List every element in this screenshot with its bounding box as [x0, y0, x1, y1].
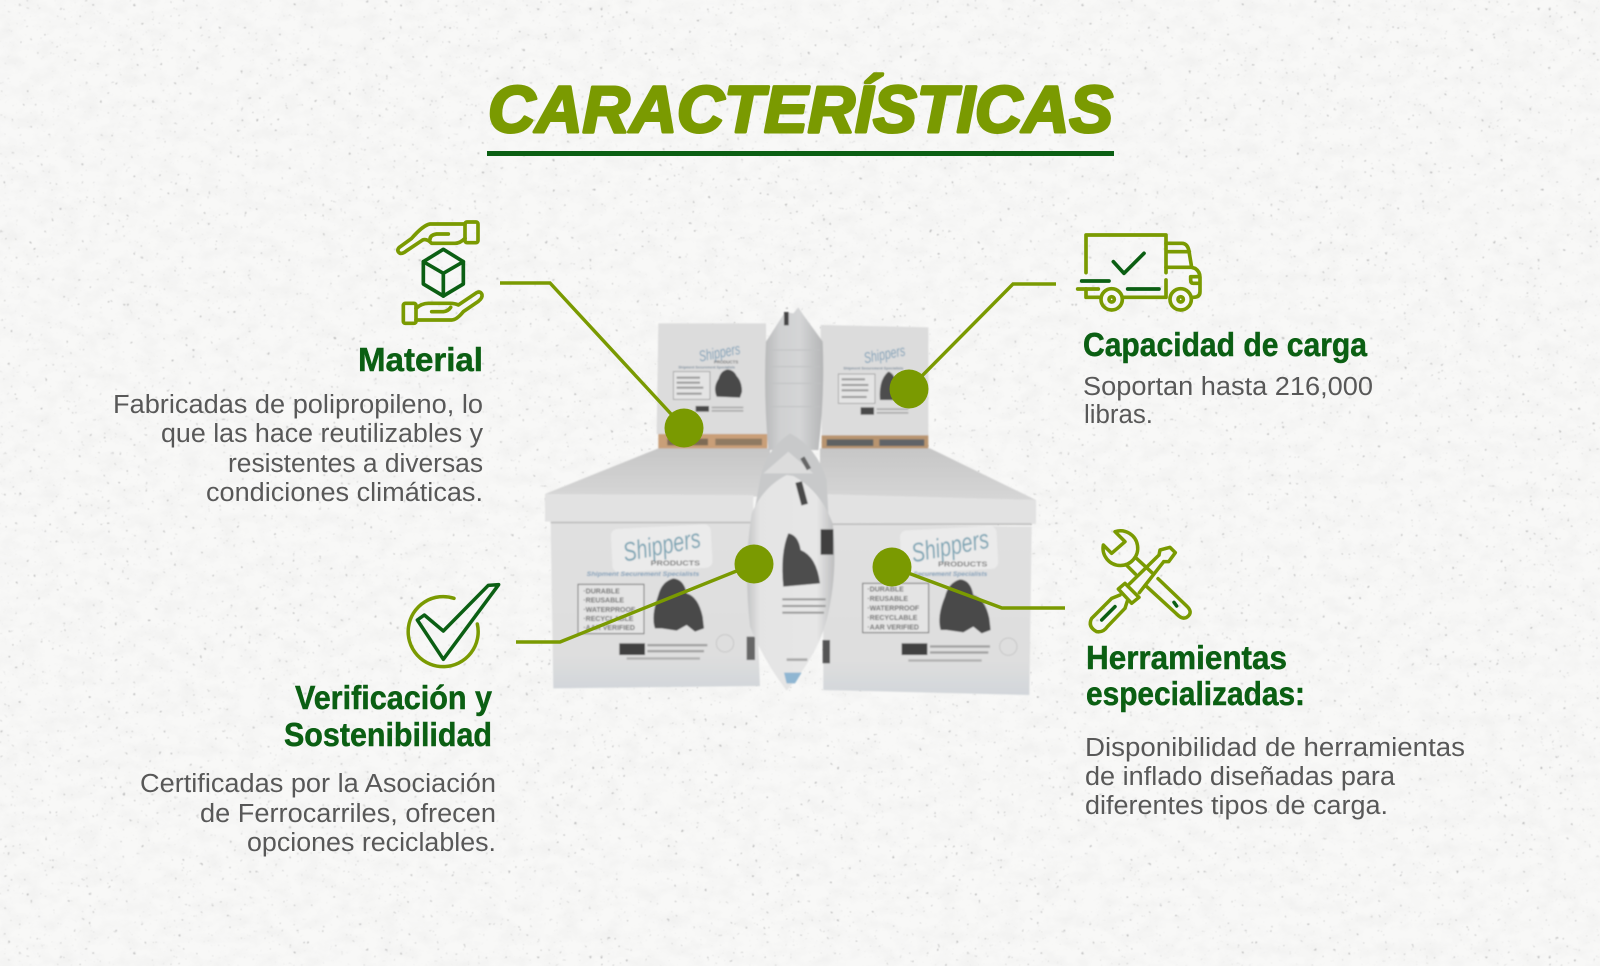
back right box: Shippers	[863, 343, 907, 367]
heading and text: Verificación y Sostenibilidad: opciones reciclables.	[247, 829, 496, 857]
icon: hands holding box	[398, 222, 482, 323]
heading and text: Herramientas especializadas: especializadas:	[1086, 675, 1305, 712]
callout line and dot: Material	[500, 283, 704, 448]
heading and text: Herramientas especializadas: Disponibilidad de herramientas	[1085, 734, 1465, 762]
upper dunnage bag	[765, 307, 823, 450]
back left box: Shippers	[698, 341, 742, 366]
lower dunnage bag	[747, 433, 835, 691]
callout line and dot: Capacidad de carga	[890, 284, 1056, 408]
back left box: Shipment Securement Specialists	[678, 364, 736, 369]
back right box: Shipment Securement Specialists	[843, 365, 904, 370]
product photo: boxes and dunnage bags	[545, 307, 1036, 695]
heading and text: Verificación y Sostenibilidad: Certificadas por la Asociación	[140, 770, 496, 798]
heading and text: Material: resistentes a diversas	[228, 450, 483, 478]
heading and text: Capacidad de carga: Capacidad de carga	[1083, 326, 1368, 363]
heading and text: Herramientas especializadas	[1085, 639, 1465, 820]
heading and text: Material: condiciones climáticas.	[206, 479, 483, 507]
heading and text: Material: Material	[358, 341, 483, 378]
heading and text: Material: que las hace reutilizables y	[161, 420, 483, 448]
front left box: Shippers	[620, 523, 703, 568]
icon: check mark in circle	[408, 585, 499, 667]
front right box	[820, 448, 1036, 695]
heading and text: Material: Fabricadas de polipropileno, lo	[113, 391, 483, 419]
heading and text: Verificación y Sostenibilidad: Sostenibilidad	[284, 716, 492, 753]
callout line and dot: Herramientas	[872, 548, 1065, 608]
heading and text: Material	[113, 341, 483, 507]
heading and text: Capacidad de carga	[1083, 326, 1373, 429]
back right box	[821, 325, 928, 449]
heading and text: Verificación y Sostenibilidad: Verificación y	[295, 679, 493, 716]
heading and text: Herramientas especializadas: de inflado diseñadas para	[1085, 763, 1396, 791]
heading and text: Verificación y Sostenibilidad	[140, 679, 496, 857]
title: CARACTERÍSTICAS	[488, 72, 1113, 146]
front left box: ·AAR VERIFIED	[583, 625, 635, 632]
front right box: Securement Specialists	[913, 571, 988, 578]
back left box	[657, 323, 767, 449]
front left box: Shipment Securement Specialists	[587, 571, 700, 578]
front left box: ·WATERPROOF	[583, 607, 636, 614]
heading and text: Capacidad de carga: libras.	[1084, 401, 1153, 429]
front right box: ·RECYCLABLE	[867, 615, 918, 622]
icon: wrench and screwdriver	[1090, 531, 1190, 632]
heading and text: Capacidad de carga: Soportan hasta 216,000	[1083, 373, 1373, 401]
heading and text: Verificación y Sostenibilidad: de Ferrocarriles, ofrecen	[200, 800, 496, 828]
front right box: ·WATERPROOF	[867, 606, 920, 613]
front left box: ·DURABLE	[583, 588, 620, 595]
front right box: ·AAR VERIFIED	[867, 624, 919, 631]
front left box	[545, 448, 770, 688]
front right box: ·DURABLE	[867, 587, 904, 594]
front left box: ·REUSABLE	[583, 598, 624, 605]
front right box: PRODUCTS	[938, 560, 987, 569]
front left box: PRODUCTS	[651, 559, 700, 568]
callout line and dot: Verificación	[516, 544, 774, 642]
icon: delivery truck	[1078, 235, 1200, 310]
heading and text: Herramientas especializadas: Herramientas	[1086, 639, 1287, 676]
back left box: PRODUCTS	[714, 359, 738, 364]
front left box: ·RECYCLABLE	[583, 616, 634, 623]
heading and text: Herramientas especializadas: diferentes tipos de carga.	[1085, 792, 1388, 820]
front right box: Shippers	[909, 524, 991, 568]
front right box: ·REUSABLE	[867, 596, 908, 603]
